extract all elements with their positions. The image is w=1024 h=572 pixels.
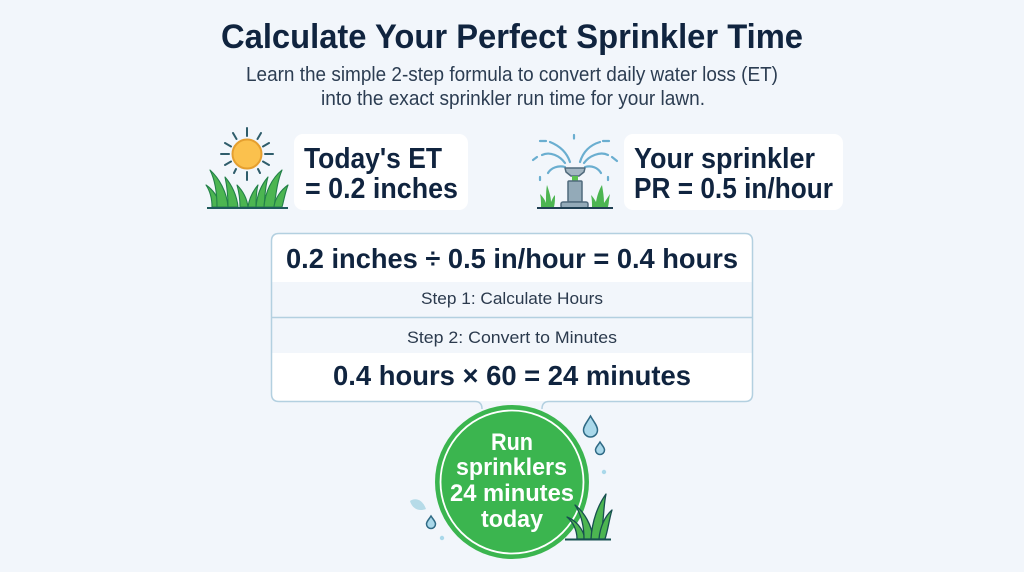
icon: sprinkler bbox=[533, 135, 617, 208]
step 2 equation: 0.4 hours × 60 = 24 minutes bbox=[333, 360, 691, 391]
subtitle: Learn the simple 2-step formula to convert daily water loss (ET) bbox=[246, 64, 778, 86]
result badge: sprinklers bbox=[456, 454, 567, 481]
result badge bbox=[435, 405, 589, 559]
result badge: today bbox=[481, 506, 544, 533]
card: today's ET bbox=[294, 134, 468, 210]
icon: grass tuft bbox=[565, 494, 612, 540]
step 2 label: Step 2: Convert to Minutes bbox=[407, 328, 617, 347]
subtitle: into the exact sprinkler run time for your lawn. bbox=[321, 88, 705, 110]
icon: water drops bbox=[410, 416, 606, 540]
title: Calculate Your Perfect Sprinkler Time bbox=[221, 18, 803, 56]
card: sprinkler PR: Your sprinkler bbox=[634, 143, 815, 175]
card: today's ET: = 0.2 inches bbox=[305, 173, 458, 205]
result badge: Run bbox=[491, 429, 533, 456]
card: sprinkler PR: PR = 0.5 in/hour bbox=[634, 173, 833, 205]
formula panel bbox=[272, 234, 752, 409]
subtitle bbox=[246, 64, 778, 110]
result badge: 24 minutes bbox=[450, 480, 574, 507]
step 1 equation: 0.2 inches ÷ 0.5 in/hour = 0.4 hours bbox=[286, 243, 738, 274]
card: today's ET: Today's ET bbox=[304, 143, 442, 175]
card: sprinkler PR bbox=[624, 134, 843, 210]
icon: sun and grass bbox=[206, 128, 288, 208]
step 1 label: Step 1: Calculate Hours bbox=[421, 289, 603, 308]
